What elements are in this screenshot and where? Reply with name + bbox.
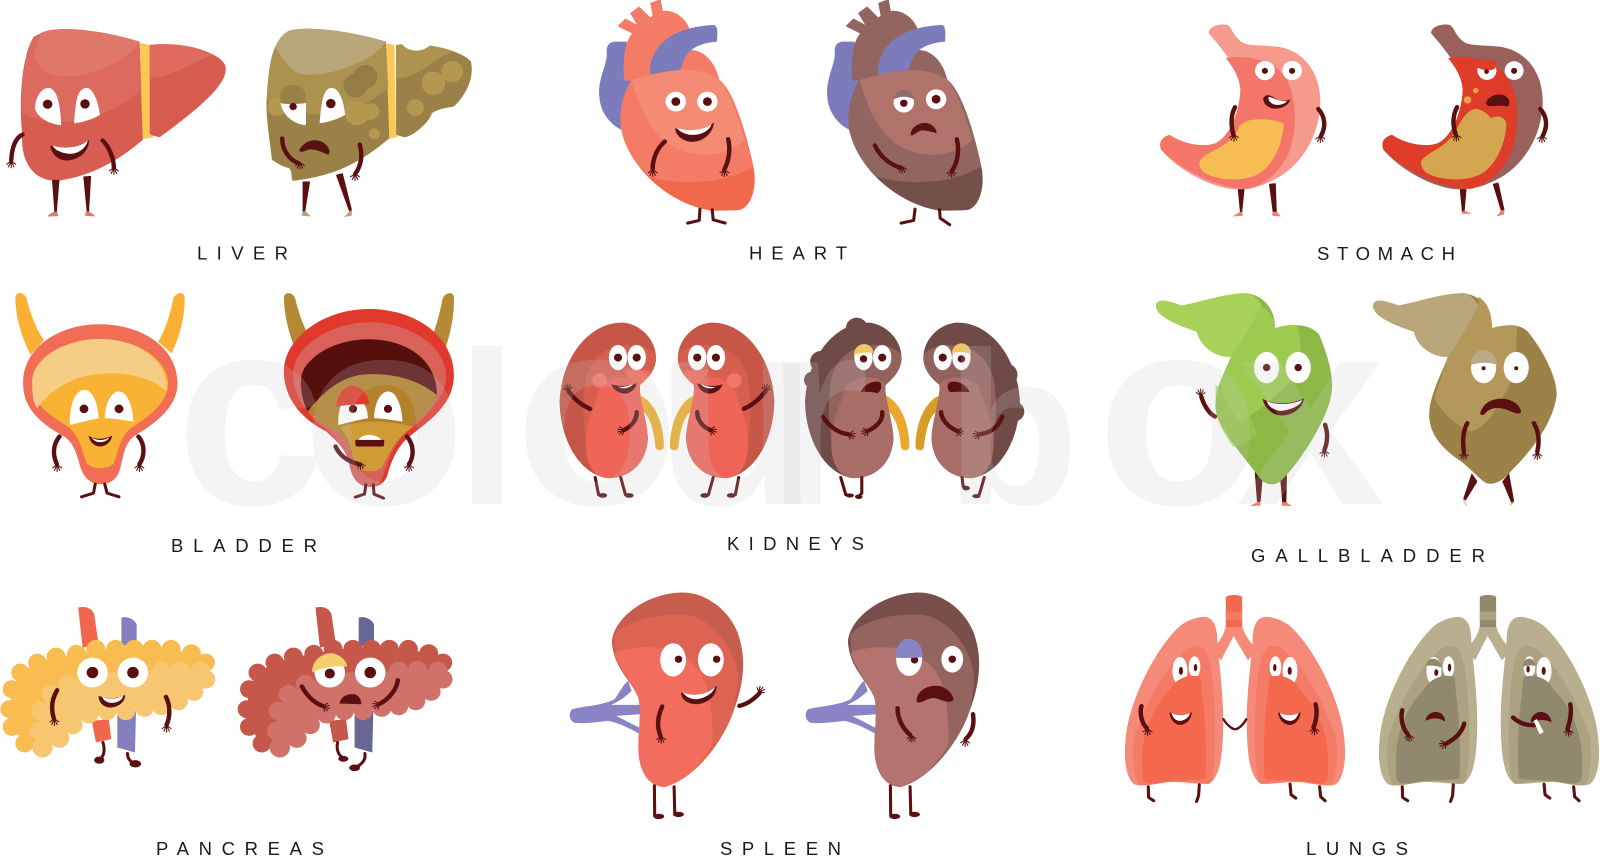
panel: stomach [1160, 25, 1546, 264]
character: healthy bladder [15, 293, 185, 497]
character: diseased heart [827, 0, 983, 225]
character: healthy heart [599, 0, 755, 223]
label: STOMACH: STOMACH [1317, 243, 1455, 264]
healthy right lung [1247, 617, 1345, 801]
diseased right kidney [916, 323, 1024, 498]
character: diseased stomach [1382, 25, 1546, 216]
character: healthy stomach [1160, 25, 1325, 216]
character: diseased bladder [284, 293, 454, 498]
panel: spleen [570, 593, 979, 856]
character: healthy lungs [1125, 595, 1345, 801]
label: BLADDER: BLADDER [171, 535, 317, 556]
character: healthy liver [7, 29, 226, 216]
watermark: l [457, 308, 518, 551]
panel: liver [7, 29, 472, 263]
healthy left lung [1125, 617, 1223, 801]
character: diseased liver [266, 29, 472, 217]
watermark: r [765, 261, 869, 561]
label: GALLBLADDER: GALLBLADDER [1251, 545, 1485, 566]
watermark: u [655, 261, 819, 561]
character: diseased pancreas [238, 607, 453, 771]
watermark: o [1097, 261, 1261, 561]
diseased left lung [1379, 617, 1477, 801]
panel: gallbladder [1156, 293, 1557, 566]
joined hands [1223, 719, 1246, 729]
healthy right kidney [670, 323, 774, 498]
character: healthy kidney pair [560, 323, 774, 498]
label: KIDNEYS: KIDNEYS [727, 533, 864, 554]
diseased right lung [1501, 617, 1599, 801]
watermark: b [946, 308, 1079, 551]
panel: bladder [15, 293, 454, 556]
character: healthy spleen [570, 593, 766, 819]
character: healthy gallbladder [1156, 293, 1332, 506]
character: healthy pancreas [0, 607, 215, 767]
character: diseased gallbladder [1373, 293, 1557, 505]
healthy left kidney [560, 323, 664, 498]
panel: lungs [1125, 595, 1599, 856]
character: diseased lungs [1379, 595, 1599, 801]
panel: pancreas [0, 607, 453, 856]
panel: heart [599, 0, 983, 264]
watermark: c [176, 261, 325, 561]
character: diseased spleen [806, 593, 979, 819]
cigarette [1534, 719, 1544, 734]
watermark: x [1236, 261, 1387, 561]
label: HEART: HEART [749, 242, 847, 264]
panel: kidneys [560, 318, 1024, 554]
character: diseased kidney pair [804, 318, 1024, 499]
diseased left kidney [804, 318, 909, 499]
watermark: o [302, 261, 466, 561]
label: LIVER: LIVER [197, 242, 288, 264]
watermark: o [515, 261, 679, 561]
